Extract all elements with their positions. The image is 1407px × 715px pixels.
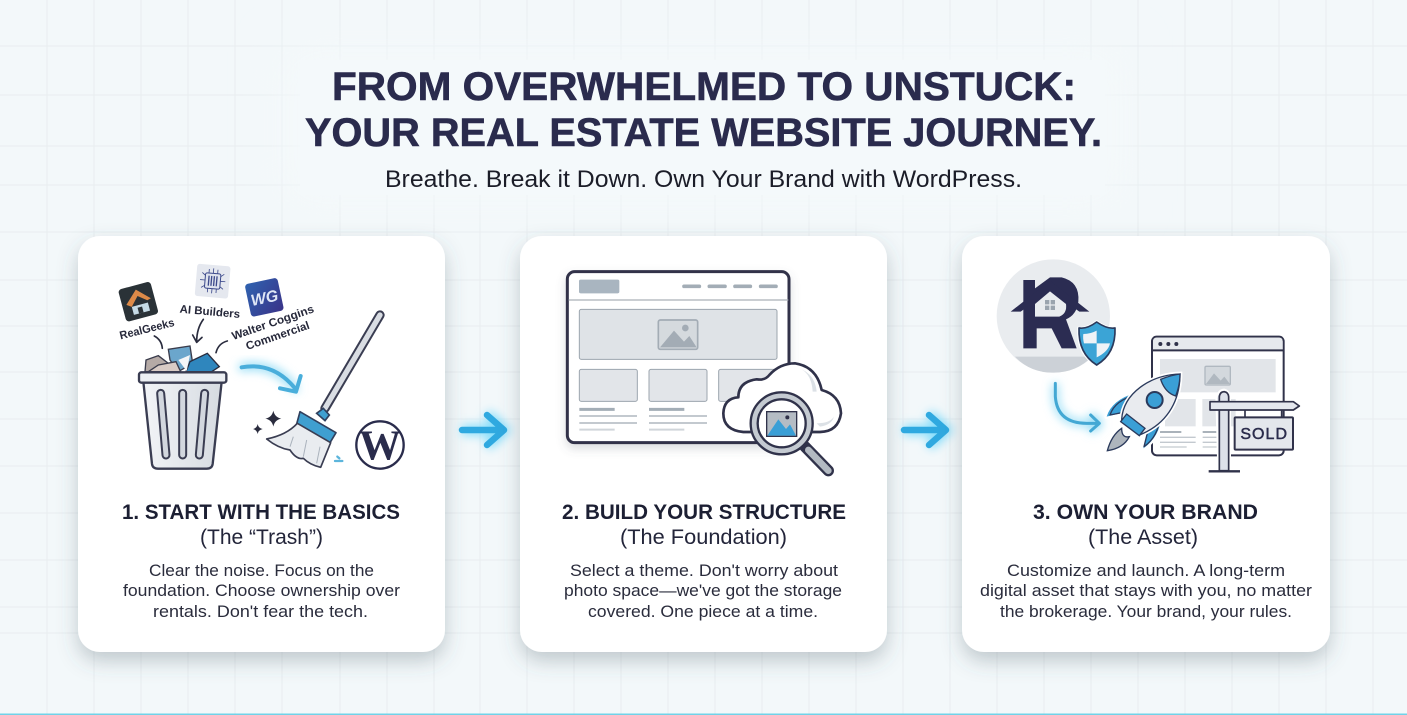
illustration: brand, rocket and sign <box>997 259 1299 471</box>
curved arrow <box>1055 383 1099 432</box>
heading: 2. BUILD YOUR STRUCTURE <box>562 501 846 524</box>
body text: foundation. Choose ownership over <box>123 582 401 600</box>
subheading: (The Asset) <box>1088 526 1198 549</box>
browser wireframe <box>567 272 789 443</box>
icon: RealGeeks <box>118 281 159 322</box>
title <box>305 65 1102 155</box>
browser window <box>1152 337 1284 455</box>
illustration: trash and broom: AI Builders <box>179 304 241 321</box>
trash contents <box>145 356 168 372</box>
panel: step 1 <box>78 236 445 652</box>
body text: Select a theme. Don't worry about <box>570 562 838 580</box>
subheading: (The Foundation) <box>620 526 787 549</box>
cloud <box>723 363 841 432</box>
icon: WG <box>245 278 284 317</box>
illustration: wireframe and cloud <box>567 272 841 471</box>
sparkles <box>253 411 281 434</box>
SOLD sign: SOLD <box>1240 426 1287 443</box>
body text <box>123 562 401 621</box>
arrow: step 1 to 2 <box>462 414 504 446</box>
arrow: step 2 to 3 <box>904 414 946 446</box>
shield <box>1077 320 1117 367</box>
heading: 3. OWN YOUR BRAND <box>1033 501 1258 524</box>
trash can <box>143 382 222 469</box>
magnifier <box>751 392 828 471</box>
subtitle: Breathe. Break it Down. Own Your Brand with WordPress. <box>385 166 1022 193</box>
body text: the brokerage. Your brand, your rules. <box>1000 603 1292 621</box>
illustration: trash and broom: Commercial <box>244 320 311 353</box>
illustration: trash and broom <box>118 264 404 470</box>
broom <box>325 315 380 408</box>
icon: AI Builders chip <box>195 264 231 299</box>
icon: WG: WG <box>249 288 280 310</box>
body text: Customize and launch. A long-term <box>1007 562 1285 580</box>
body text: photo space—we've got the storage <box>564 582 842 600</box>
sweep arrow <box>242 366 295 388</box>
title: YOUR REAL ESTATE WEBSITE JOURNEY. <box>305 111 1102 155</box>
body text: rentals. Don't fear the tech. <box>153 603 368 621</box>
heading: 1. START WITH THE BASICS <box>122 501 400 524</box>
body text <box>980 562 1313 621</box>
panel: step 3 <box>962 236 1330 652</box>
panel: step 2 <box>520 236 887 652</box>
body text: Clear the noise. Focus on the <box>149 562 374 580</box>
logo circle <box>997 259 1110 373</box>
small arrows <box>154 319 227 353</box>
icon: WordPress: W <box>359 424 401 470</box>
body text: covered. One piece at a time. <box>588 603 818 621</box>
SOLD sign <box>1209 391 1299 471</box>
body text: digital asset that stays with you, no matter <box>980 582 1313 600</box>
body text <box>564 562 842 621</box>
rocket <box>1107 374 1180 451</box>
subheading: (The “Trash”) <box>200 526 323 549</box>
labels: RealGeeks <box>118 317 176 342</box>
title: FROM OVERWHELMED TO UNSTUCK: <box>332 65 1076 109</box>
illustration: trash and broom: Walter Coggins <box>230 303 316 343</box>
